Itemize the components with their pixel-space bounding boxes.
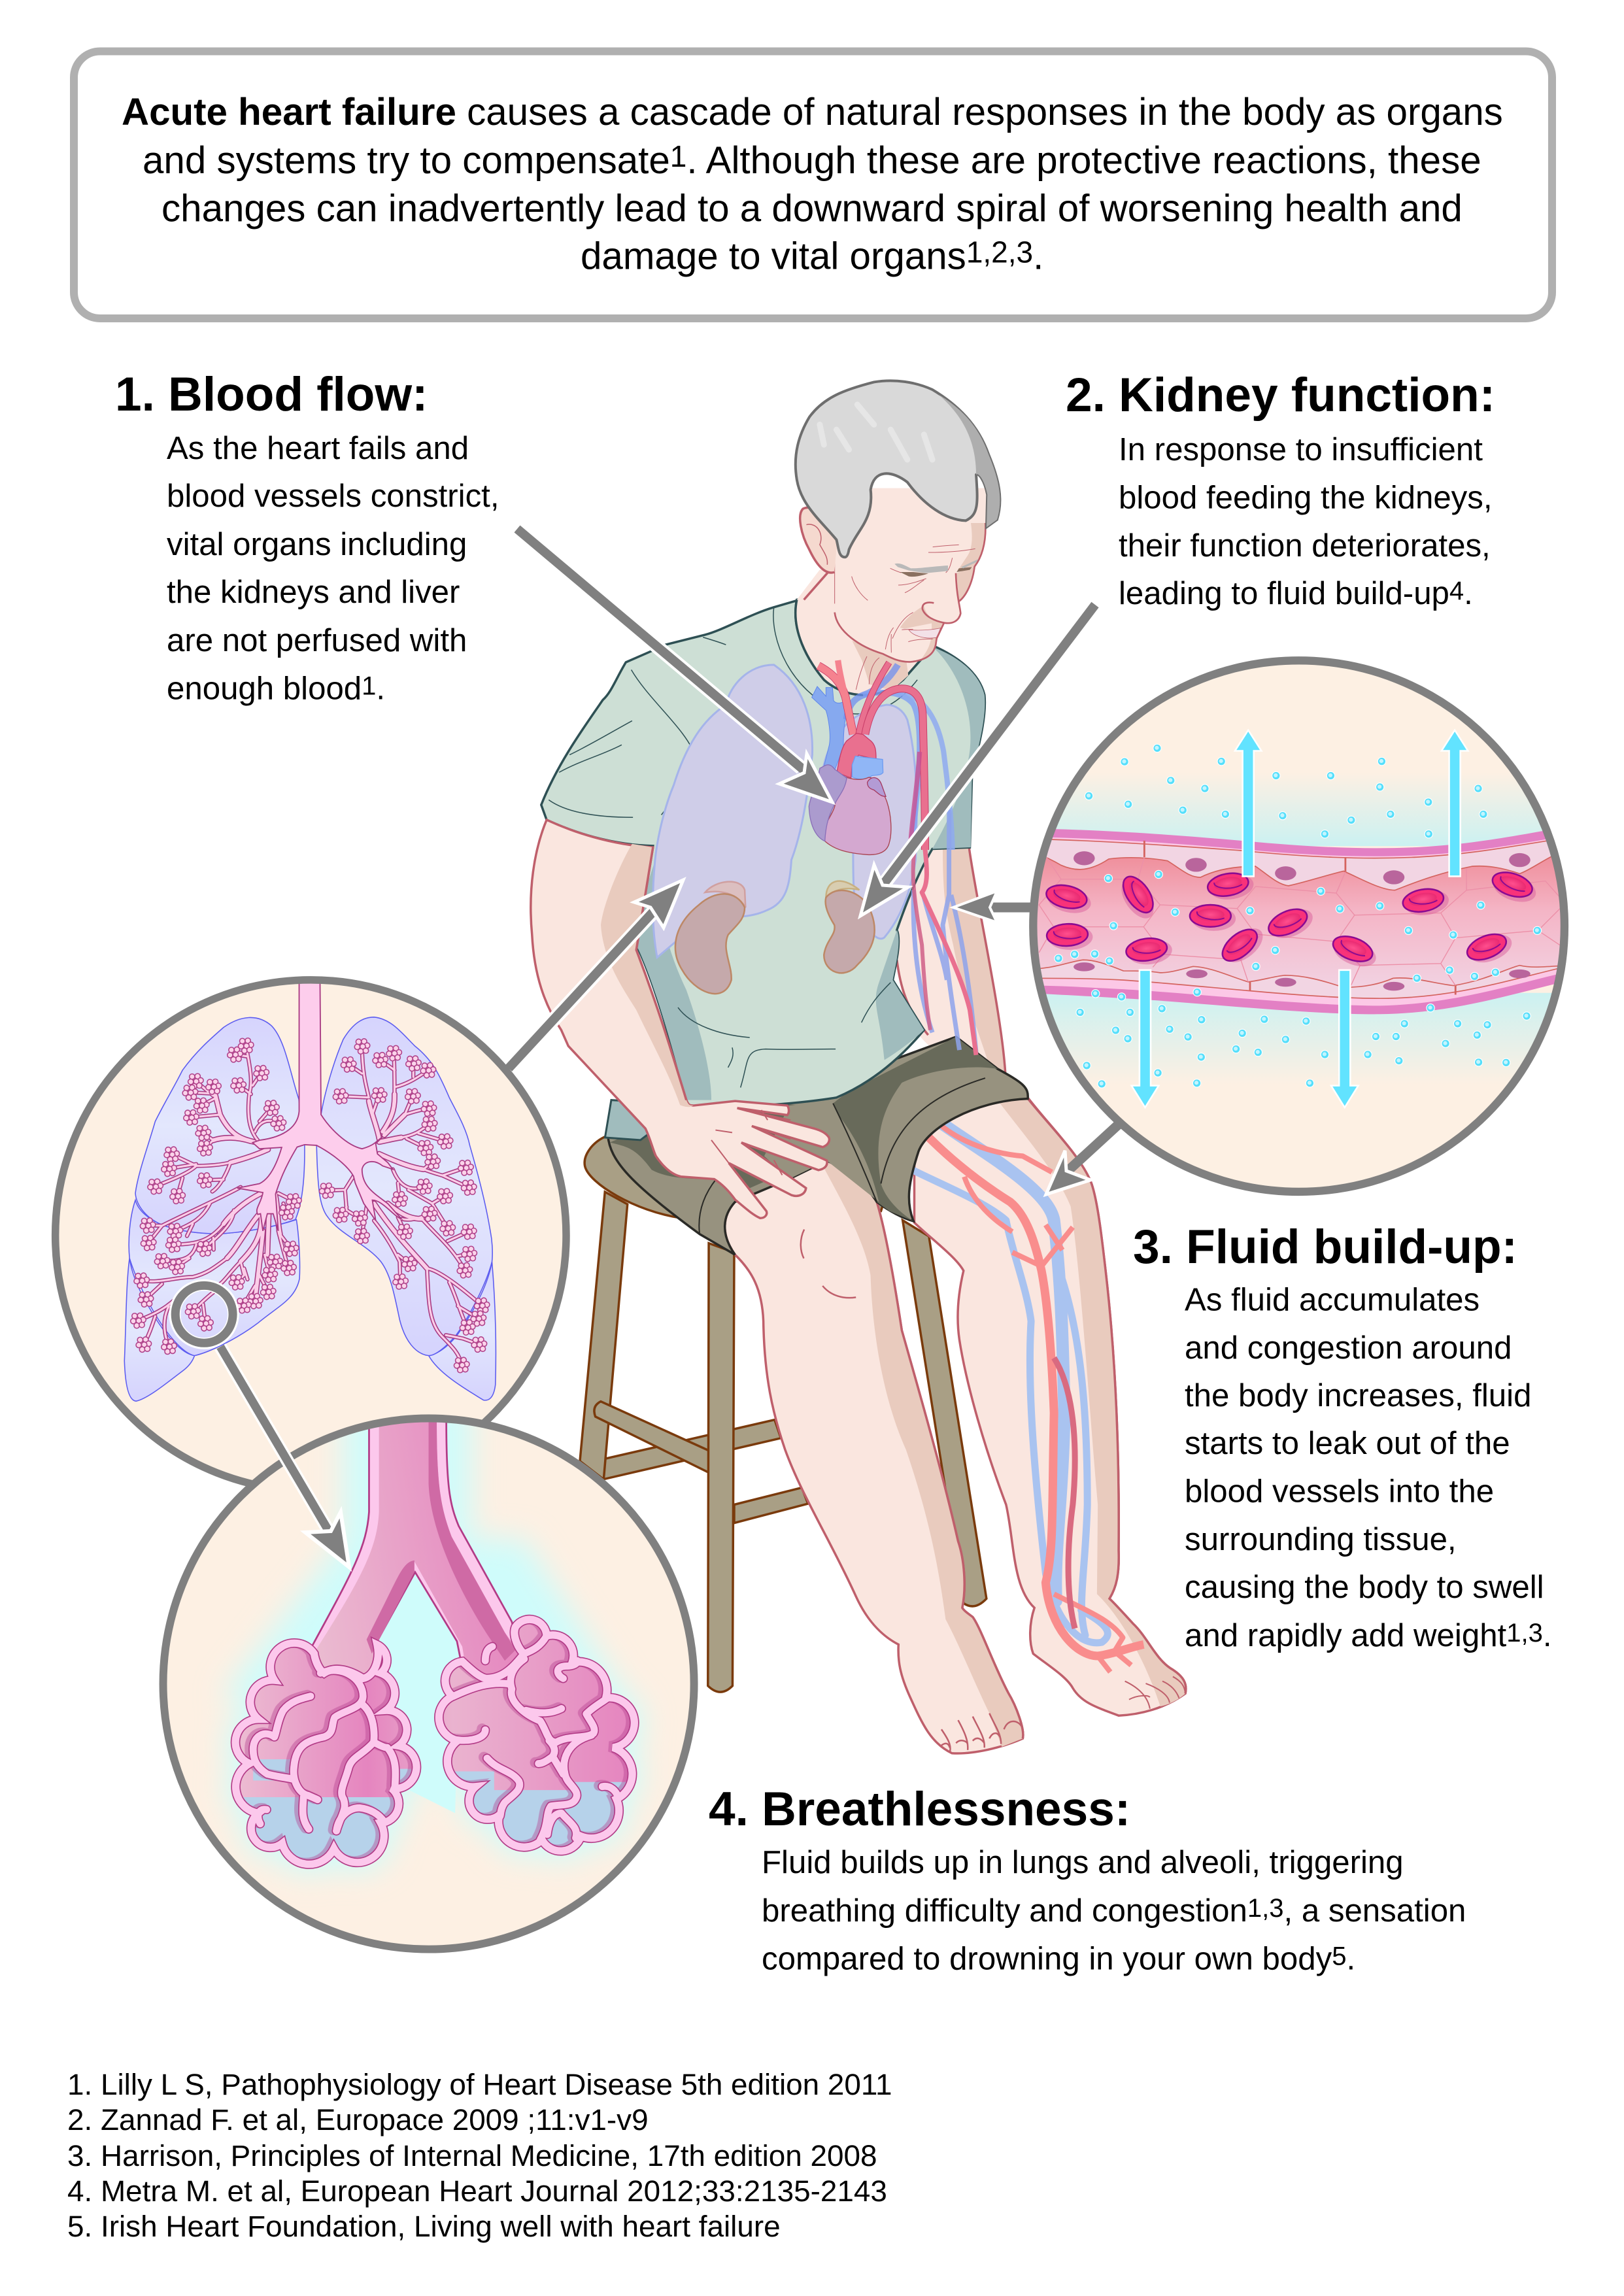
arrow: vessel to leg bbox=[1046, 1123, 1121, 1194]
magnifier ring bbox=[170, 1281, 238, 1348]
panel: alveoli magnified circle bbox=[163, 1406, 694, 1950]
arrow: heart pointer bbox=[517, 529, 832, 802]
text: intro paragraph: . Although these are protective reactions, these bbox=[686, 139, 1481, 182]
vessels: arm arteries and veins bbox=[913, 810, 976, 1055]
bronchiole tube bbox=[312, 1423, 513, 1672]
text: section 4 breathlessness: , a sensation bbox=[1284, 1893, 1466, 1929]
text: intro paragraph: 1,2,3 bbox=[966, 235, 1033, 269]
text: section 3 fluid build-up: As fluid accumulates bbox=[1185, 1281, 1480, 1318]
text: section 2 kidney function: blood feeding the kidneys, bbox=[1119, 480, 1493, 515]
text: references: 2. Zannad F. et al, Europace 2009 ;11:v1-v9 bbox=[67, 2102, 649, 2136]
text: section 2 kidney function: 4 bbox=[1449, 577, 1464, 605]
sac walls bbox=[235, 1619, 634, 1865]
text: section 1 blood flow: enough blood bbox=[167, 671, 362, 706]
vessels: leg veins bbox=[912, 1122, 1108, 1643]
text: section 3 fluid build-up: surrounding tissue, bbox=[1185, 1521, 1457, 1557]
text: section 3 fluid build-up: blood vessels into the bbox=[1185, 1474, 1494, 1509]
panel: blood vessel magnified circle bbox=[1028, 660, 1571, 1192]
panel: intro box bbox=[74, 51, 1552, 318]
text: section 1 blood flow bbox=[115, 368, 499, 706]
ear bbox=[796, 380, 1000, 573]
vessels: leg arteries bbox=[927, 1124, 1143, 1672]
text: section 3 fluid build-up: the body increases, fluid bbox=[1185, 1377, 1531, 1413]
text: section 1 blood flow: the kidneys and liver bbox=[167, 574, 460, 610]
text: section 3 fluid build-up: causing the body to swell bbox=[1185, 1569, 1544, 1605]
text: references: 3. Harrison, Principles of Internal Medicine, 17th edition 2008 bbox=[67, 2138, 877, 2172]
lungs outline bbox=[124, 1017, 496, 1401]
text: section 1 blood flow: vital organs including bbox=[167, 526, 467, 562]
organ: kidneys bbox=[675, 881, 875, 994]
illustration: shirt and torso bbox=[541, 599, 985, 1140]
text: section 3 fluid build-up bbox=[1133, 1221, 1552, 1653]
vessel lumen bbox=[1028, 848, 1571, 987]
text: references: 1. Lilly L S, Pathophysiology of Heart Disease 5th edition 2011 bbox=[67, 2067, 892, 2101]
arrow: lung to alveoli bbox=[220, 1347, 349, 1567]
alveolar sacs bbox=[240, 1624, 630, 1797]
illustration: stool bbox=[580, 1115, 987, 1692]
text: section 1 blood flow: As the heart fails and bbox=[167, 430, 469, 466]
text: section 3 fluid build-up: 3. Fluid build-up: bbox=[1133, 1221, 1517, 1274]
illustration: rear leg with vessels bbox=[912, 1073, 1186, 1715]
text: section 4 breathlessness: 5 bbox=[1332, 1942, 1346, 1970]
text: section 3 fluid build-up: starts to leak out of the bbox=[1185, 1425, 1510, 1461]
fluid droplets bbox=[1054, 744, 1542, 1089]
text: section 3 fluid build-up: 1,3 bbox=[1506, 1619, 1543, 1647]
sac shading bbox=[232, 1619, 631, 1863]
vessel wall bbox=[1028, 826, 1571, 1014]
text: section 2 kidney function: 2. Kidney function: bbox=[1066, 369, 1495, 422]
text: section 4 breathlessness: compared to drowning in your own body bbox=[762, 1940, 1332, 1977]
illustration: rear arm bbox=[897, 840, 1006, 1073]
fluid in sacs bbox=[243, 1759, 626, 1859]
text: section 3 fluid build-up: . bbox=[1543, 1617, 1552, 1653]
text: intro paragraph: damage to vital organs bbox=[581, 235, 966, 277]
text: section 2 kidney function: leading to fluid build-up bbox=[1119, 575, 1449, 611]
bronchial tree bbox=[138, 978, 482, 1365]
text: references: 5. Irish Heart Foundation, Living well with heart failure bbox=[67, 2209, 781, 2243]
text: section 2 kidney function: . bbox=[1464, 575, 1473, 611]
text: section 1 blood flow: . bbox=[376, 671, 385, 706]
panel: lungs magnified circle bbox=[56, 978, 566, 1491]
text: intro paragraph: changes can inadvertently lead to a downward spiral of worsening health and bbox=[161, 187, 1463, 230]
illustration: shorts bbox=[608, 1037, 1028, 1255]
text: intro paragraph: Acute heart failure causes a cascade of natural responses in the body as organs bbox=[122, 91, 1503, 133]
text: references bbox=[67, 2067, 892, 2243]
text: intro paragraph bbox=[122, 91, 1503, 277]
illustration: near leg bbox=[725, 1160, 1023, 1753]
text: section 1 blood flow: are not perfused with bbox=[167, 622, 467, 658]
endothelial cell lines bbox=[1039, 857, 1560, 986]
cyan glow bbox=[235, 1406, 634, 1865]
fluid arrows bbox=[1133, 732, 1466, 1106]
text: section 3 fluid build-up: and rapidly add weight bbox=[1185, 1617, 1506, 1653]
neck bbox=[796, 569, 933, 695]
arrow: lungs to thorax bbox=[509, 880, 683, 1068]
text: section 2 kidney function: their function deteriorates, bbox=[1119, 528, 1491, 564]
text: section 1 blood flow: blood vessels constrict, bbox=[167, 478, 499, 514]
feet: rear toes bbox=[1125, 1677, 1185, 1709]
alveolar clusters bbox=[131, 1038, 490, 1373]
cell nuclei bbox=[1074, 851, 1531, 990]
text: section 4 breathlessness: breathing difficulty and congestion bbox=[762, 1893, 1247, 1929]
illustration: front arm and hand bbox=[531, 820, 829, 1218]
arrow: kidney pointer bbox=[860, 605, 1095, 916]
text: intro paragraph: . bbox=[1033, 235, 1043, 277]
red blood cells bbox=[1043, 868, 1540, 971]
organ: lungs translucent bbox=[652, 665, 917, 958]
illustration: heart and great vessels bbox=[809, 660, 953, 854]
text: section 1 blood flow: 1 bbox=[362, 672, 376, 701]
text: section 2 kidney function: In response to insufficient bbox=[1119, 431, 1483, 467]
text: section 4 breathlessness: 4. Breathlessness: bbox=[709, 1783, 1130, 1836]
text: section 3 fluid build-up: and congestion around bbox=[1185, 1330, 1512, 1366]
text: section 4 breathlessness: . bbox=[1346, 1940, 1355, 1977]
text: section 1 blood flow: 1. Blood flow: bbox=[115, 368, 428, 421]
arrow: vessel to arm bbox=[953, 891, 1033, 922]
text: section 4 breathlessness: 1,3 bbox=[1247, 1894, 1284, 1923]
text: section 4 breathlessness: Fluid builds up in lungs and alveoli, triggering bbox=[762, 1844, 1404, 1880]
text: intro paragraph: 1 bbox=[670, 139, 686, 173]
text: intro paragraph: and systems try to compensate bbox=[143, 139, 670, 182]
feet: near toes bbox=[941, 1714, 1022, 1752]
text: section 4 breathlessness bbox=[709, 1783, 1466, 1977]
text: references: 4. Metra M. et al, European Heart Journal 2012;33:2135-2143 bbox=[67, 2174, 887, 2208]
hair bbox=[796, 380, 1000, 557]
illustration: head bbox=[796, 380, 1000, 695]
text: section 2 kidney function bbox=[1066, 369, 1495, 611]
